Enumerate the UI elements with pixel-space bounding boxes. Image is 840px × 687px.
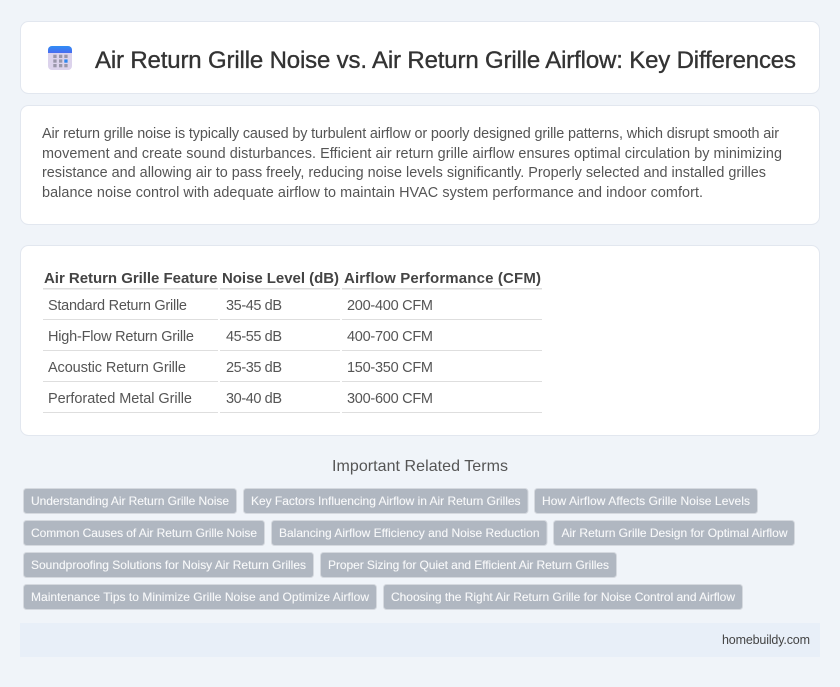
table row: acoustic	[43, 360, 542, 382]
table row: high-flow: 400-700 CFM	[347, 329, 433, 345]
tag	[272, 520, 547, 546]
icon: calendar grid	[48, 46, 72, 70]
tag	[554, 520, 794, 546]
tag	[320, 552, 616, 578]
table header	[43, 270, 542, 290]
description text: balance noise control with adequate airflow to maintain HVAC system performance and indoor comfort.	[42, 185, 703, 201]
description text: Air return grille noise is typically caused by turbulent airflow or poorly designed grille patterns, which disrupt smooth air	[42, 126, 779, 142]
table row: perforated: Perforated Metal Grille	[48, 391, 192, 407]
table row: acoustic: 150-350 CFM	[347, 360, 433, 376]
related terms tags	[24, 488, 794, 610]
table row: standard: 35-45 dB	[226, 298, 282, 314]
description text	[42, 126, 782, 201]
tag	[244, 488, 528, 514]
table row: high-flow: 45-55 dB	[226, 329, 282, 345]
description text: resistance and allowing air to pass freely, reducing noise levels significantly. Properly selected and installed grilles	[42, 165, 766, 181]
table row: high-flow: High-Flow Return Grille	[48, 329, 194, 345]
tag: Proper Sizing for Quiet and Efficient Air Return Grilles	[328, 558, 609, 572]
tag: Balancing Airflow Efficiency and Noise Reduction	[279, 526, 540, 540]
table row: perforated: 300-600 CFM	[347, 391, 433, 407]
tag: Key Factors Influencing Airflow in Air Return Grilles	[251, 494, 520, 508]
tag: Soundproofing Solutions for Noisy Air Return Grilles	[31, 558, 306, 572]
tag: Choosing the Right Air Return Grille for Noise Control and Airflow	[391, 590, 735, 604]
tag: How Airflow Affects Grille Noise Levels	[542, 494, 750, 508]
tag: Understanding Air Return Grille Noise	[31, 494, 229, 508]
tag	[24, 552, 314, 578]
tag	[24, 488, 236, 514]
panel: description	[20, 106, 820, 224]
footer source text: homebuildy.com	[722, 633, 810, 647]
tag	[24, 520, 264, 546]
tag	[534, 488, 758, 514]
tag: Maintenance Tips to Minimize Grille Noise and Optimize Airflow	[31, 590, 369, 604]
title: Air Return Grille Noise vs. Air Return Grille Airflow: Key Differences	[95, 47, 796, 74]
table header: Airflow Performance (CFM)	[344, 270, 541, 287]
table row: acoustic: 25-35 dB	[226, 360, 282, 376]
table header: Noise Level (dB)	[222, 270, 339, 287]
table row: high-flow	[43, 329, 542, 351]
table row: perforated: 30-40 dB	[226, 391, 282, 407]
tag	[384, 584, 742, 610]
header panel	[20, 22, 820, 94]
description text: movement and create sound disturbances. Efficient air return grille airflow ensures optimal circulation by minimizing	[42, 146, 782, 162]
tag: Common Causes of Air Return Grille Noise	[31, 526, 257, 540]
table row: standard: Standard Return Grille	[48, 298, 187, 314]
tag: Air Return Grille Design for Optimal Airflow	[562, 526, 788, 540]
table row: standard: 200-400 CFM	[347, 298, 433, 314]
table header: Air Return Grille Feature	[44, 270, 218, 287]
table row: acoustic: Acoustic Return Grille	[48, 360, 186, 376]
table row: perforated	[43, 391, 542, 413]
footer	[20, 623, 820, 657]
tag	[24, 584, 376, 610]
panel: comparison table	[20, 246, 820, 436]
related terms heading: Important Related Terms	[332, 458, 508, 475]
table row: standard	[43, 298, 542, 320]
